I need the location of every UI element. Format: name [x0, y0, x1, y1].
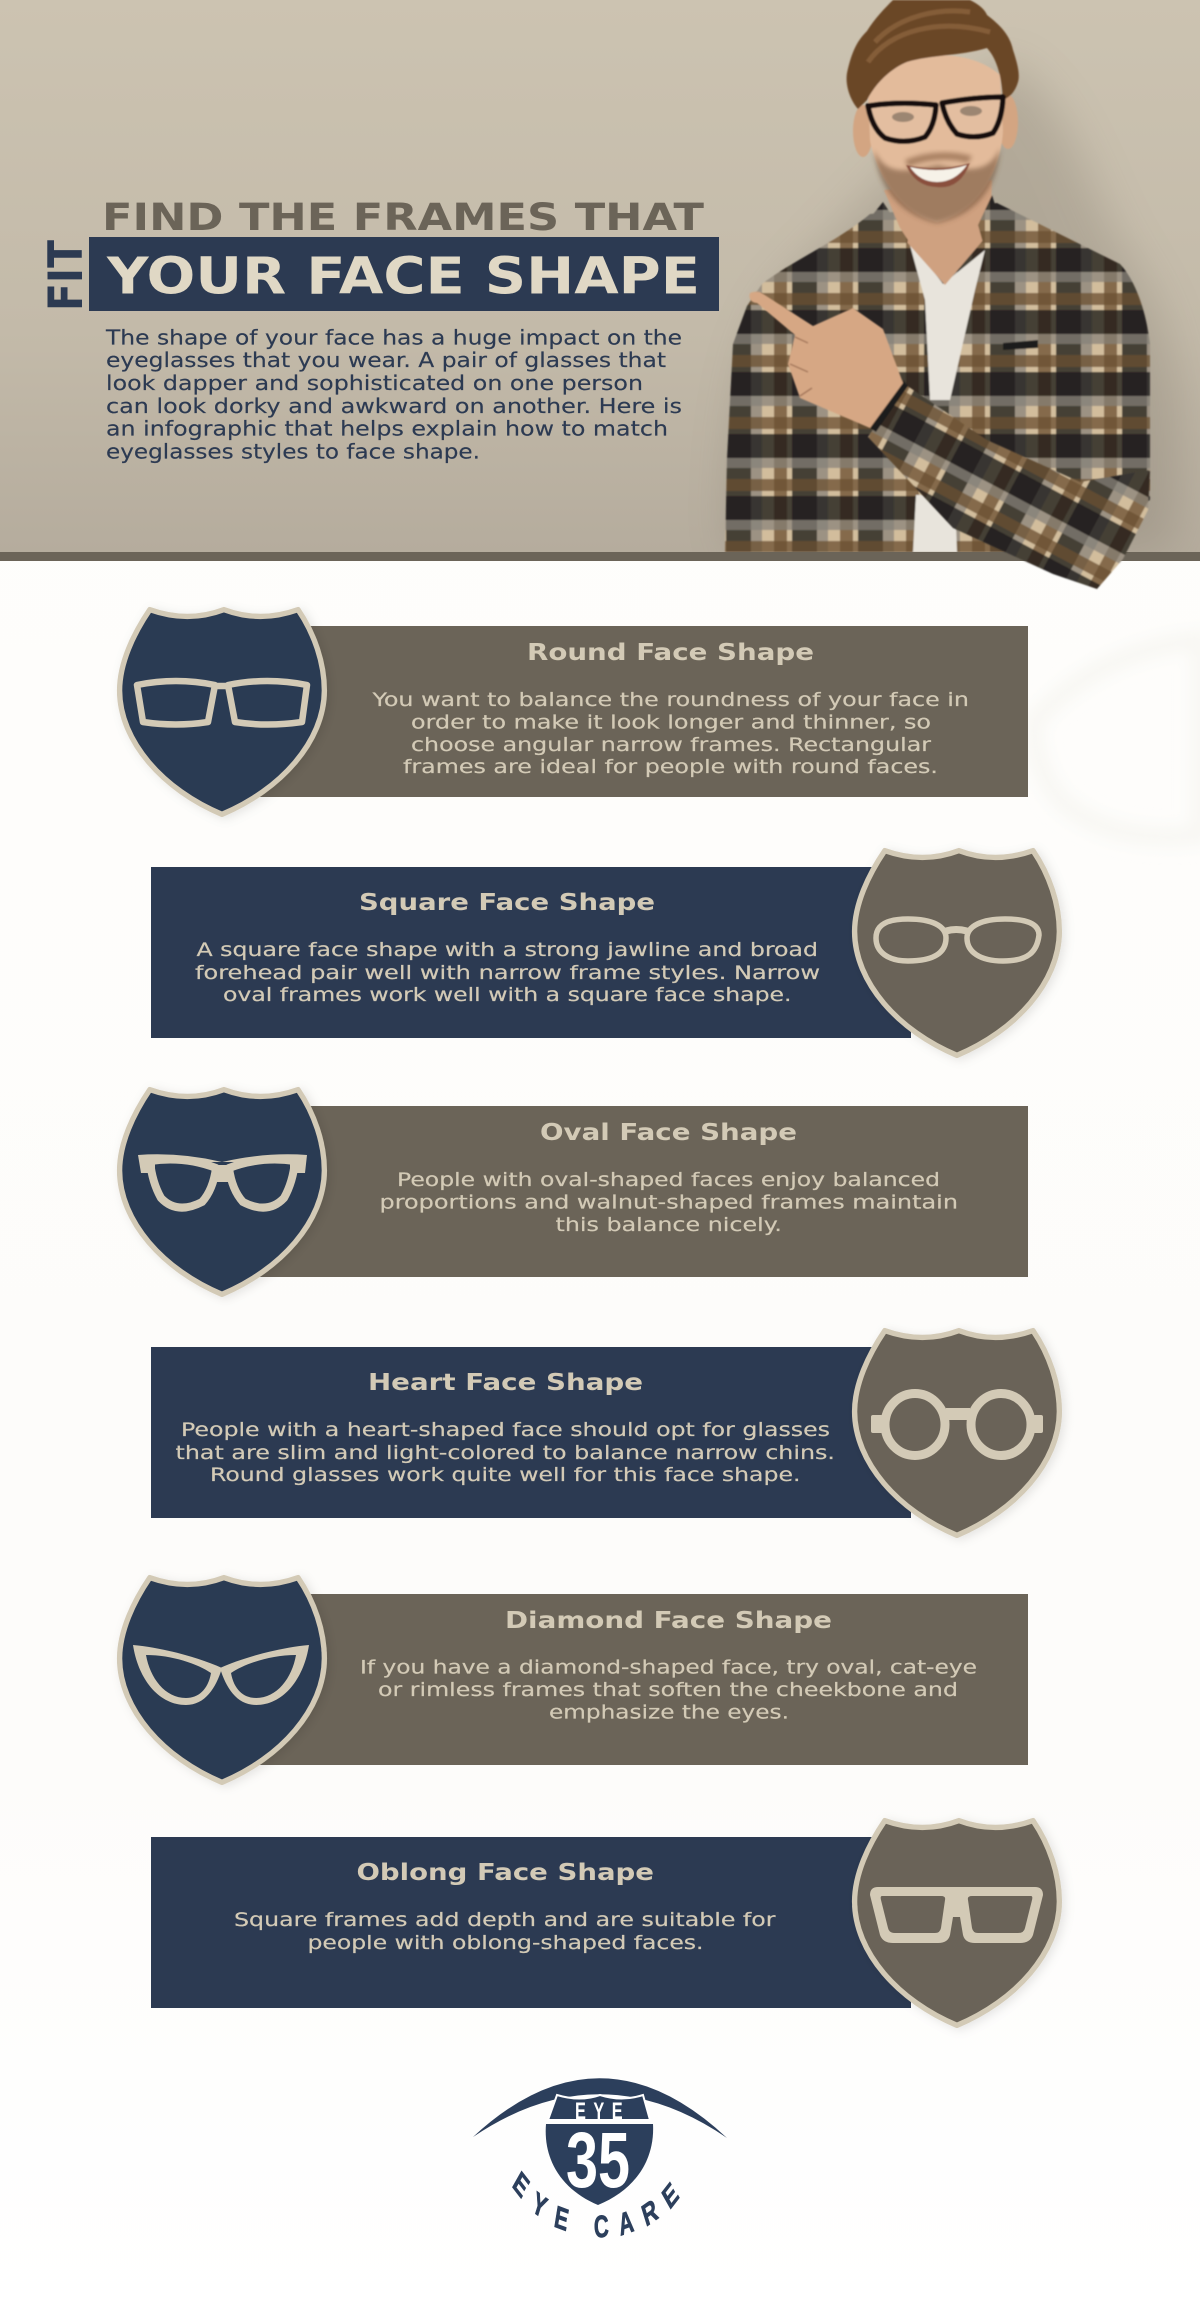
- panel: heart face shape: [151, 1331, 1059, 1535]
- panel: oblong face shape: [151, 1821, 1059, 2025]
- heading: round: Round Face Shape: [527, 638, 814, 666]
- body: heart: that are slim and light-colored to balance narrow chins.: [176, 1442, 835, 1464]
- collar: [870, 202, 908, 272]
- beard: [874, 148, 1000, 223]
- icon: cat-eye glasses: [133, 1645, 309, 1705]
- logo number: 35: 35: [566, 2115, 630, 2204]
- heading: heart: Heart Face Shape: [368, 1368, 643, 1396]
- shield badge: heart: [855, 1331, 1059, 1535]
- body: round: order to make it look longer and thinner, so: [411, 712, 931, 734]
- face: [868, 55, 1003, 222]
- body: oval: [380, 1169, 958, 1236]
- body: heart: People with a heart-shaped face should opt for glasses: [181, 1419, 830, 1441]
- icon: narrow oval glasses: [876, 919, 1039, 961]
- man photo: head: [847, 0, 1019, 223]
- title: Find the frames that: FIND THE FRAMES THAT: [102, 196, 705, 239]
- shield badge: round: [120, 610, 324, 814]
- body: round: You want to balance the roundness of your face in: [371, 689, 969, 711]
- heading: oval: Oval Face Shape: [540, 1118, 797, 1146]
- shield badge: oblong: [855, 1821, 1059, 2025]
- logo eyebrow arc: [473, 2078, 727, 2138]
- body: diamond: emphasize the eyes.: [549, 1702, 789, 1724]
- body: oval: proportions and walnut-shaped frames maintain: [380, 1192, 958, 1214]
- intro paragraph: look dapper and sophisticated on one person: [106, 371, 643, 395]
- icon: walnut glasses: [138, 1154, 307, 1208]
- pocket flap: [1003, 340, 1038, 350]
- body: round: [371, 689, 969, 778]
- logo: Eye 35 Eye Care: [473, 2078, 727, 2238]
- icon: square glasses: [870, 1887, 1043, 1943]
- body: diamond: [360, 1656, 977, 1724]
- shield badge: square: [855, 851, 1059, 1055]
- body: square: A square face shape with a strong jawline and broad: [196, 939, 818, 961]
- body: oblong: [234, 1909, 776, 1954]
- intro paragraph: [105, 326, 682, 464]
- white t-shirt: [908, 238, 985, 400]
- body: oval: People with oval-shaped faces enjoy balanced: [397, 1169, 940, 1191]
- body: square: oval frames work well with a square face shape.: [223, 984, 792, 1006]
- icon: rectangular glasses: [137, 681, 307, 724]
- shield badge: oval: [120, 1090, 324, 1294]
- intro paragraph: can look dorky and awkward on another. Here is: [106, 394, 682, 418]
- body: heart: Round glasses work quite well for this face shape.: [210, 1464, 800, 1486]
- heading: square: Square Face Shape: [359, 888, 655, 916]
- body: oblong: people with oblong-shaped faces.: [308, 1932, 704, 1954]
- body: heart: [176, 1419, 835, 1486]
- bottom bar: [0, 552, 1200, 561]
- hair: [847, 0, 1019, 109]
- header band: [0, 0, 1200, 552]
- panel: oval face shape: [120, 1090, 1028, 1294]
- body: oblong: Square frames add depth and are suitable for: [234, 1909, 776, 1931]
- ears: [853, 105, 873, 157]
- body: diamond: If you have a diamond-shaped face, try oval, cat-eye: [360, 1656, 977, 1678]
- intro paragraph: eyeglasses that you wear. A pair of glasses that: [106, 348, 666, 372]
- intro paragraph: eyeglasses styles to face shape.: [106, 440, 480, 464]
- panel: round face shape: [120, 610, 1028, 814]
- body: square: [195, 939, 820, 1006]
- title: Your face shape: YOUR FACE SHAPE: [106, 248, 700, 306]
- neck: [884, 180, 992, 285]
- man photo: forearm and hand: [749, 292, 1150, 589]
- panel: diamond face shape: [120, 1578, 1028, 1782]
- title: Your face shape: [89, 237, 719, 311]
- mouth: [906, 163, 970, 187]
- moustache: [905, 152, 972, 167]
- body: square: forehead pair well with narrow frame styles. Narrow: [195, 962, 820, 984]
- title: vertical Fit: FIT: [39, 240, 94, 311]
- heading: oblong: Oblong Face Shape: [356, 1858, 654, 1886]
- shield badge: diamond: [120, 1578, 324, 1782]
- body: round: frames are ideal for people with round faces.: [403, 756, 938, 778]
- intro paragraph: The shape of your face has a huge impact on the: [105, 326, 682, 350]
- heading: diamond: Diamond Face Shape: [505, 1606, 832, 1634]
- icon: round glasses: [871, 1394, 1043, 1456]
- body: oval: this balance nicely.: [556, 1214, 782, 1236]
- logo text: eye: EYE: [575, 2098, 623, 2125]
- eyes: [892, 112, 914, 122]
- wall shadow behind man: [808, 66, 1186, 552]
- man photo: torso: [725, 180, 1150, 552]
- black glasses: [868, 97, 1003, 141]
- body: diamond: or rimless frames that soften the cheekbone and: [378, 1679, 958, 1701]
- forearm sleeve: [868, 383, 1150, 589]
- intro paragraph: an infographic that helps explain how to match: [106, 416, 668, 440]
- logo shield: [546, 2095, 653, 2205]
- logo text: eye care: EYE CARE: [512, 2170, 680, 2238]
- panel: square face shape: [151, 851, 1059, 1055]
- hand: [749, 292, 903, 428]
- shirt body: [725, 203, 1150, 552]
- body: round: choose angular narrow frames. Rectangular: [411, 734, 931, 756]
